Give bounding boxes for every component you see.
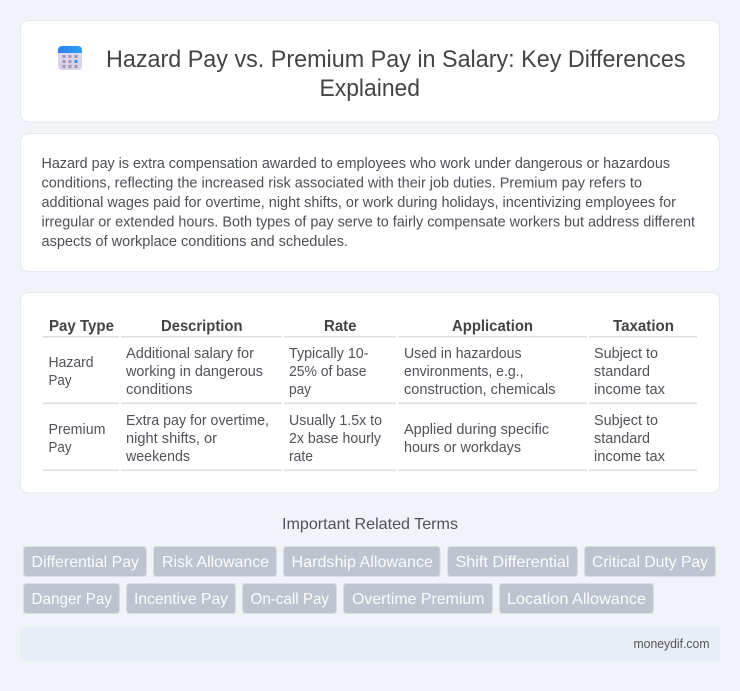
table row: hazard pay: Additional salary for [126,346,254,362]
table row: premium pay: Applied during specific [404,422,549,438]
icon: calendar [58,46,82,70]
panel: introduction [20,134,720,272]
table row: premium pay: rate [289,449,313,465]
panel: title header [20,20,720,122]
tag: on-call pay [242,584,336,614]
tag: risk allowance: Risk Allowance [162,554,269,571]
table row: hazard pay: environments, e.g., [404,364,524,380]
table header row: Description [161,318,242,335]
tag: incentive pay: Incentive Pay [134,591,228,608]
table row: hazard pay: Subject to [594,346,658,362]
tag: critical duty pay [584,546,716,576]
tag: differential pay: Differential Pay [32,554,139,571]
tag: hardship allowance: Hardship Allowance [292,554,433,571]
tag: danger pay [24,584,120,614]
tag: incentive pay [126,584,236,614]
intro paragraph: irregular or extended hours. Both types of pay serve to fairly compensate workers but address different [42,214,695,230]
intro paragraph: additional wages paid for overtime, night shifts, or work during holidays, incentivizing employees for [42,195,676,211]
table row: hazard pay: Pay [48,373,72,389]
table header row: Pay Type [49,318,114,335]
table row: premium pay: hours or workdays [404,440,521,456]
tag: risk allowance [154,546,276,576]
intro paragraph [42,156,695,250]
table row: hazard pay: pay [289,382,312,398]
table row: premium pay: Extra pay for overtime, [126,413,269,429]
title [106,46,686,102]
tag: overtime premium: Overtime Premium [352,591,484,608]
table header row: Taxation [613,318,674,335]
table row: premium pay: Pay [48,440,72,456]
table row: premium pay: 2x base hourly [289,431,382,447]
table header row: Application [452,318,533,335]
table row: hazard pay: Typically 10- [289,346,369,362]
table row: hazard pay: income tax [594,382,666,398]
footer source text: moneydif.com [634,636,710,651]
tag: on-call pay: On-call Pay [250,591,329,608]
tag: location allowance: Location Allowance [507,591,646,608]
table row: hazard pay: working in dangerous [125,364,263,380]
table row: premium pay: Usually 1.5x to [289,413,382,429]
title: Hazard Pay vs. Premium Pay in Salary: Key Differences [106,46,686,73]
tag: shift differential [448,546,578,576]
tag: overtime premium [344,584,492,614]
panel: comparison table [20,292,720,493]
intro paragraph: conditions, reflecting the increased risk associated with their job duties. Premium pay refers to [42,176,642,192]
table row: premium pay: night shifts, or [126,431,217,447]
tag: differential pay [24,546,146,576]
table row: hazard pay: Hazard [48,355,94,371]
tag: danger pay: Danger Pay [32,591,112,608]
table row: hazard pay: Used in hazardous [404,346,522,362]
tag: critical duty pay: Critical Duty Pay [592,554,708,571]
table row: hazard pay [43,346,697,404]
table row: premium pay: income tax [594,449,666,465]
table header row: Rate [324,318,357,335]
table row: hazard pay: 25% of base [289,364,366,380]
intro paragraph: Hazard pay is extra compensation awarded to employees who work under dangerous or hazardous [42,156,670,172]
table row: premium pay [43,413,697,471]
heading: important related terms: Important Related Terms [282,516,458,533]
table row: hazard pay: standard [594,364,650,380]
table row: hazard pay: construction, chemicals [404,382,556,398]
footer bar [20,627,720,661]
tag: shift differential: Shift Differential [456,554,570,571]
table row: hazard pay: conditions [126,382,192,398]
table row: premium pay: Premium [48,422,106,438]
table header row [43,318,697,338]
table row: premium pay: standard [594,431,650,447]
tag: location allowance [500,584,654,614]
table row: premium pay: weekends [125,449,190,465]
title: Explained [320,75,420,102]
intro paragraph: aspects of workplace conditions and schedules. [42,234,348,250]
related term tags [24,546,716,614]
tag: hardship allowance [284,546,440,576]
table row: premium pay: Subject to [594,413,658,429]
